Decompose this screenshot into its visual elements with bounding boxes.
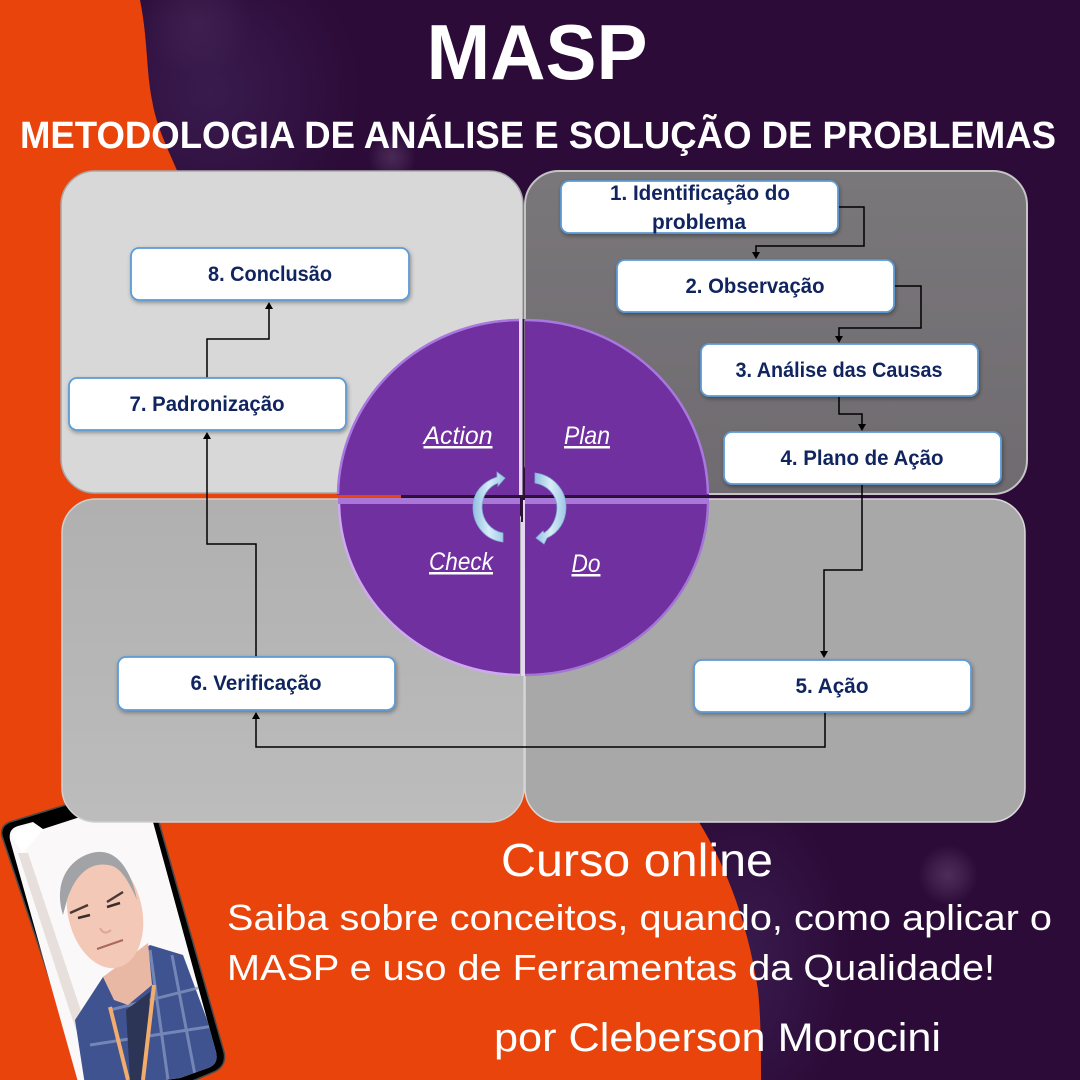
- label: Do: Do: [572, 550, 601, 578]
- step 8: [131, 248, 409, 300]
- step 1: problema: [652, 211, 746, 234]
- connector: step 6 to 7: [203, 432, 256, 657]
- connector: step 2 to 3: [835, 286, 921, 343]
- step 2: [617, 260, 894, 312]
- step 6: 6. Verificação: [190, 672, 322, 695]
- step 2: 2. Observação: [686, 275, 824, 298]
- panel: do quadrant: [525, 499, 1025, 822]
- course description: MASP e uso de Ferramentas da Qualidade!: [227, 947, 995, 988]
- label: Plan: Plan: [564, 422, 610, 450]
- phone with author photo: [0, 804, 226, 1080]
- step 3: 3. Análise das Causas: [736, 359, 942, 382]
- panel: check quadrant: [62, 499, 524, 822]
- connector: step 1 to 2: [752, 207, 864, 259]
- step 8: 8. Conclusão: [208, 263, 332, 286]
- PDCA circle: [337, 319, 709, 676]
- step 5: [694, 660, 971, 712]
- step 6: [118, 657, 395, 710]
- panel: act quadrant: [61, 171, 523, 493]
- step 1: 1. Identificação do: [610, 182, 790, 205]
- step 5: 5. Ação: [796, 675, 868, 698]
- step 3: [701, 344, 978, 396]
- connector: step 7 to 8: [207, 302, 273, 378]
- step 7: 7. Padronização: [130, 393, 284, 416]
- subtitle: METODOLOGIA DE ANÁLISE E SOLUÇÃO DE PROBLEMAS: [20, 113, 1056, 157]
- author credit: por Cleberson Morocini: [494, 1016, 941, 1060]
- step 7: [69, 378, 346, 430]
- connector: step 5 to 6: [252, 712, 825, 747]
- step 4: [724, 432, 1001, 484]
- course description: [227, 897, 1052, 988]
- course heading: Curso online: [501, 834, 773, 886]
- course description: Saiba sobre conceitos, quando, como aplicar o: [227, 897, 1052, 938]
- label: Action: Action: [422, 422, 492, 450]
- connector: step 3 to 4: [839, 397, 866, 431]
- panel: plan quadrant: [525, 171, 1027, 494]
- title: MASP: [426, 8, 648, 96]
- icon: left cycle arrow: [473, 472, 505, 542]
- step 1: [561, 181, 838, 234]
- label: Check: Check: [429, 548, 494, 576]
- connector: step 4 to 5: [820, 485, 862, 658]
- step 4: 4. Plano de Ação: [780, 447, 944, 470]
- icon: right cycle arrow: [535, 473, 566, 544]
